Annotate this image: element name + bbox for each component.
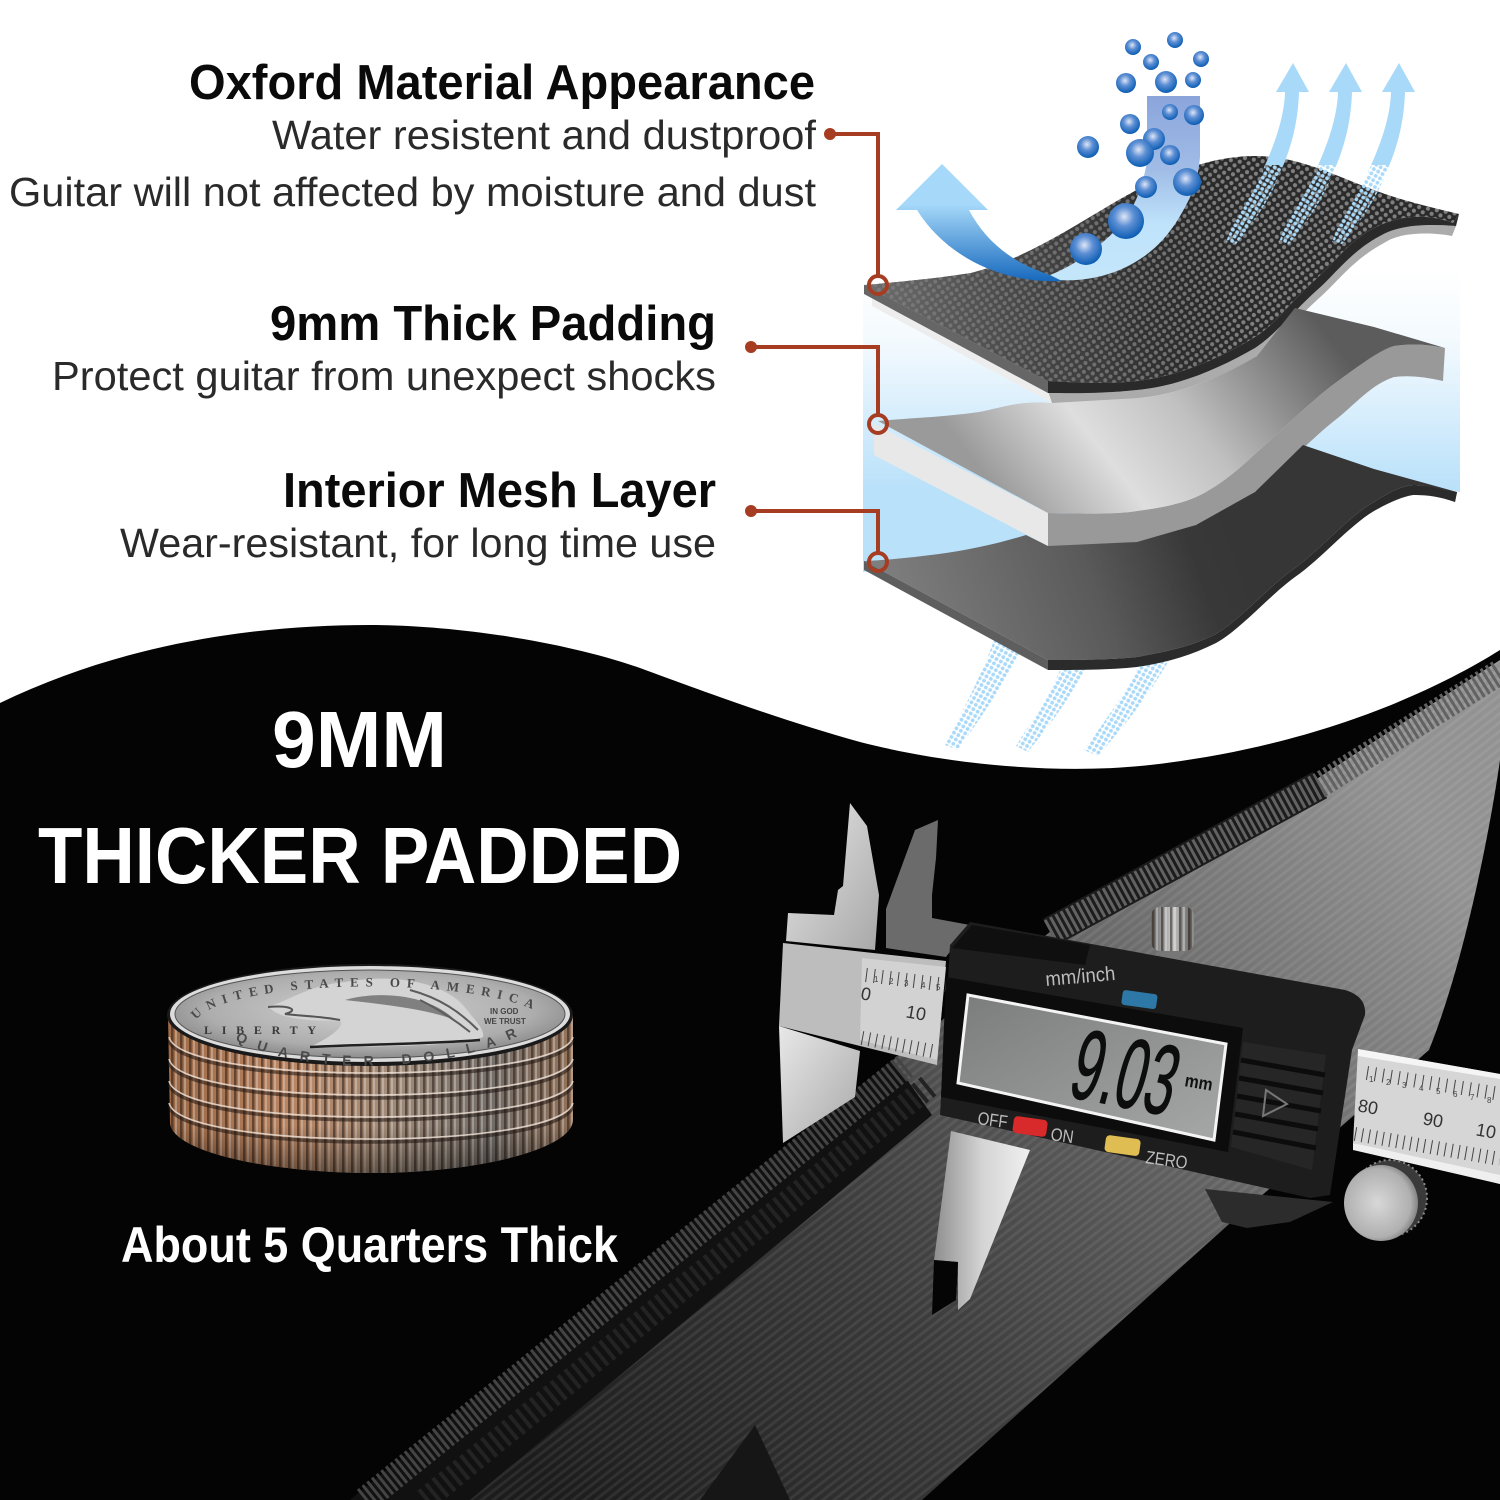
- label: OFF: OFF: [976, 1108, 1009, 1132]
- text block: Interior Mesh Layer: [120, 464, 716, 566]
- text block: Oxford Material Appearance: Guitar will not affected by moisture and dust: [9, 169, 817, 215]
- light blue backdrop: [863, 214, 1460, 572]
- button: blue: [1121, 990, 1158, 1009]
- text block: Oxford Material Appearance: Oxford Material Appearance: [189, 56, 815, 110]
- beam right: 3: [1402, 1081, 1407, 1090]
- beam right: 8: [1487, 1096, 1492, 1105]
- text block: 9mm Thick Padding: 9mm Thick Padding: [270, 297, 716, 351]
- layer: padding foam: [874, 308, 1445, 546]
- beam left: 2: [889, 977, 894, 986]
- white wave top panel: [0, 0, 1500, 769]
- label: ZERO: ZERO: [1144, 1147, 1189, 1173]
- icon: stack of five quarters: WE TRUST: [484, 1017, 526, 1026]
- lcd frame: [941, 977, 1243, 1152]
- layer: oxford outer: [864, 156, 1459, 403]
- icon: stack of five quarters: UNITED STATES OF AMERICA: [190, 978, 532, 1018]
- label: ON: ON: [1049, 1124, 1075, 1147]
- lower jaw moving: [932, 1131, 1030, 1315]
- beam right: 5: [1436, 1087, 1441, 1096]
- text block: Oxford Material Appearance: Water resistent and dustproof: [272, 112, 817, 158]
- beam left: 1: [874, 975, 879, 984]
- callout line: oxford: [826, 130, 887, 294]
- beam left: 3: [904, 979, 909, 988]
- beam right: 2: [1386, 1078, 1391, 1087]
- beam left: 5: [936, 983, 941, 992]
- gear roller: [1205, 1189, 1333, 1228]
- label: mm/inch: mm/inch: [1045, 963, 1116, 991]
- photo: digital caliper: [779, 803, 1500, 1315]
- diagram: layered material: [863, 32, 1460, 756]
- arrows: rising air: [1226, 63, 1415, 244]
- beam right: 1: [1369, 1075, 1374, 1084]
- text block: Interior Mesh Layer: Wear-resistant, for long time use: [120, 520, 716, 566]
- lock knob: [1344, 1160, 1427, 1241]
- thumb screw: [1151, 907, 1194, 964]
- icon: stack of five quarters: LIBERTY: [204, 1023, 316, 1037]
- lcd unit: mm: [1183, 1070, 1214, 1095]
- heading: 9MM: 9MM: [272, 695, 447, 784]
- thumb roller grip: [1231, 1042, 1326, 1170]
- upper jaw moving: [886, 820, 970, 957]
- arrows: dotted air under layers: [945, 640, 1180, 756]
- beam right: 10: [1474, 1120, 1498, 1143]
- text block: Interior Mesh Layer: Interior Mesh Layer: [283, 464, 716, 518]
- beam right: [1353, 1049, 1500, 1184]
- beam left: 0: [859, 983, 873, 1005]
- beam right: 7: [1470, 1093, 1475, 1102]
- beam right: 90: [1421, 1109, 1445, 1132]
- layer: interior mesh: [864, 445, 1457, 670]
- beam right: 80: [1356, 1096, 1380, 1119]
- text block: 9mm Thick Padding: [52, 297, 716, 399]
- beam left: 4: [921, 981, 926, 990]
- text block: Oxford Material Appearance: [9, 56, 817, 215]
- beam right: 4: [1419, 1084, 1424, 1093]
- beam left: [779, 943, 946, 1065]
- caption: About 5 Quarters Thick: About 5 Quarters Thick: [121, 1217, 618, 1273]
- photo: guitar bag fabric with zipper: [350, 660, 1500, 1500]
- button: yellow: [1104, 1135, 1141, 1156]
- caliper body: [940, 922, 1365, 1198]
- arrow: water bounce flow: [896, 96, 1200, 281]
- button: red: [1012, 1116, 1048, 1137]
- heading: THICKER PADDED: THICKER PADDED: [38, 811, 682, 900]
- icons: water droplets: [1070, 32, 1209, 265]
- icon: stack of five quarters: QUARTER DOLLAR: [237, 1028, 517, 1066]
- lower jaw fixed: [779, 1026, 860, 1143]
- beam left: 10: [904, 1002, 928, 1025]
- text block: 9mm Thick Padding: Protect guitar from unexpect shocks: [52, 353, 716, 399]
- icon: stack of five quarters: [167, 964, 574, 1173]
- callout line: mesh: [747, 507, 887, 571]
- callout line: padding: [747, 343, 887, 433]
- icon: stack of five quarters: IN GOD: [490, 1007, 519, 1016]
- beam right: 6: [1453, 1090, 1458, 1099]
- lcd reading: 9.03: [1060, 1009, 1191, 1137]
- upper jaw fixed: [786, 803, 879, 950]
- body top ridge: [952, 925, 1090, 965]
- lcd screen: [958, 995, 1226, 1140]
